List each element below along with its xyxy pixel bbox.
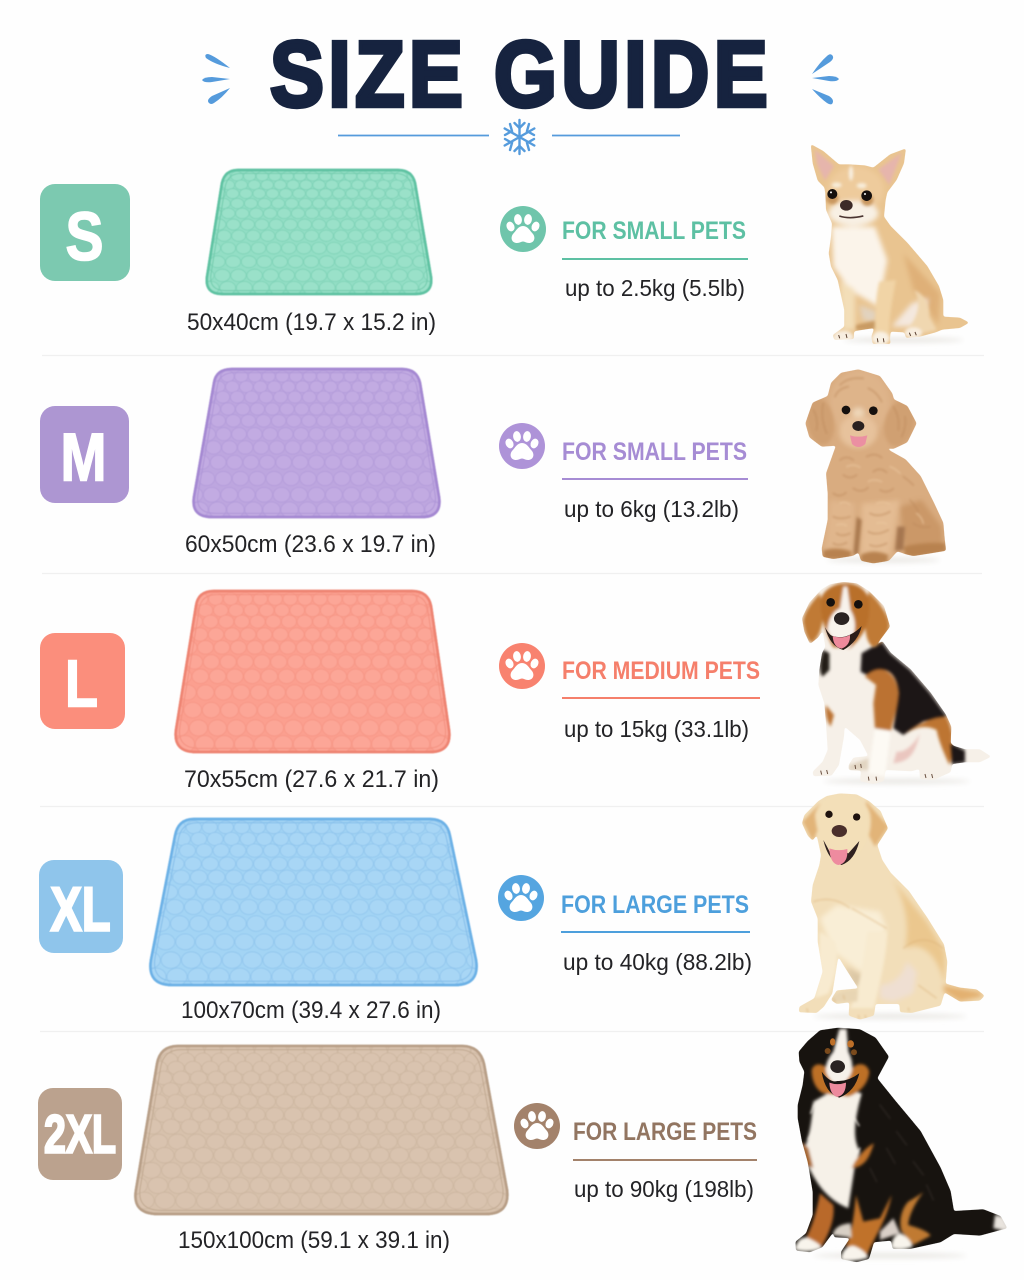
badge M — [40, 406, 129, 503]
mat L — [174, 588, 452, 754]
icon: paw M — [499, 423, 545, 469]
mat XL dimensions: 100x70cm (39.4 x 27.6 in) — [181, 997, 441, 1024]
label M: FOR SMALL PETS — [562, 438, 747, 466]
weight L: up to 15kg (33.1lb) — [564, 716, 749, 742]
panel: size XL — [0, 792, 990, 1025]
mat S — [204, 168, 434, 296]
dog: bernese mountain dog — [790, 1025, 1013, 1268]
icon: paw S — [500, 206, 546, 252]
panel: size S — [40, 140, 977, 347]
icon: left sparkle drops — [202, 54, 230, 104]
badge XL — [39, 860, 123, 953]
badge M: M — [60, 420, 106, 496]
badge 2XL — [38, 1088, 122, 1180]
badge S — [40, 184, 130, 281]
rule L — [562, 697, 760, 699]
title underline with snowflake — [338, 120, 680, 154]
icon: paw XL — [498, 875, 544, 921]
dog: chihuahua — [811, 145, 968, 344]
mat M dimensions: 60x50cm (23.6 x 19.7 in) — [185, 531, 436, 558]
label S: FOR SMALL PETS — [562, 217, 746, 245]
mat S dimensions: 50x40cm (19.7 x 15.2 in) — [187, 309, 436, 336]
dog: labrador — [793, 792, 990, 1025]
mat XL — [148, 816, 479, 988]
weight XL: up to 40kg (88.2lb) — [563, 949, 752, 975]
mat 2XL dimensions: 150x100cm (59.1 x 39.1 in) — [178, 1227, 450, 1254]
badge XL: XL — [50, 876, 110, 944]
label XL: FOR LARGE PETS — [561, 891, 749, 919]
icon: snowflake — [505, 120, 534, 154]
rule S — [562, 258, 748, 260]
badge L: L — [65, 646, 98, 722]
badge 2XL: 2XL — [44, 1104, 116, 1164]
rule XL — [561, 931, 750, 933]
badge L — [40, 633, 125, 729]
weight S: up to 2.5kg (5.5lb) — [565, 275, 745, 301]
panel: size 2XL — [5, 1025, 1013, 1268]
rule 2XL — [573, 1159, 757, 1161]
mat 2XL — [133, 1044, 510, 1216]
icon: paw L — [499, 643, 545, 689]
dividers — [40, 356, 984, 1032]
dog: beagle — [797, 580, 997, 787]
weight 2XL: up to 90kg (198lb) — [574, 1176, 754, 1202]
icon: right sparkle drops — [812, 54, 839, 104]
mat L dimensions: 70x55cm (27.6 x 21.7 in) — [184, 766, 439, 793]
panel: size M — [40, 367, 950, 567]
panel: size L — [18, 580, 997, 793]
weight M: up to 6kg (13.2lb) — [564, 496, 739, 522]
icon: paw 2XL — [514, 1103, 560, 1149]
rule M — [562, 478, 748, 480]
label 2XL: FOR LARGE PETS — [573, 1118, 757, 1146]
mat M — [192, 367, 442, 519]
dog: poodle — [800, 367, 950, 567]
title: SIZE GUIDE — [270, 23, 772, 126]
badge S: S — [66, 198, 104, 275]
label L: FOR MEDIUM PETS — [562, 657, 760, 685]
